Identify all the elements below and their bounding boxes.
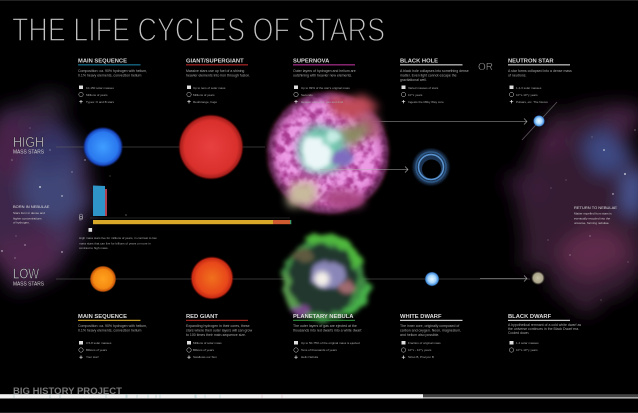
nebula: birth, left bbox=[0, 90, 90, 283]
panel: white dwarf: and helium also possible. bbox=[400, 333, 439, 337]
panel: top main sequence: MAIN SEQUENCE bbox=[78, 58, 127, 64]
timeline band bbox=[0, 394, 638, 398]
panel: red giant: Billions of years bbox=[193, 348, 215, 352]
panel: giant/supergiant bbox=[186, 58, 250, 104]
panel: planetary nebula: PLANETARY NEBULA bbox=[293, 314, 354, 320]
panel: black dwarf: Cooled down. bbox=[508, 331, 529, 335]
panel: bottom main sequence: Composition: ca. 90% hydrogen with helium, bbox=[78, 324, 147, 328]
star: low-mass main sequence bbox=[90, 266, 116, 292]
panel: black dwarf: 10^x-10^y years bbox=[516, 348, 538, 352]
heading: high mass stars: HIGH bbox=[13, 135, 44, 151]
panel: black hole: gravitational well. bbox=[400, 78, 427, 82]
star: high-mass main sequence bbox=[82, 126, 124, 168]
panel: planetary nebula: thousands into red dwarfs into a white dwarf. bbox=[293, 328, 362, 332]
footer: big history project bbox=[0, 386, 638, 398]
panel: planetary nebula bbox=[293, 314, 362, 359]
panel: red giant: RED GIANT bbox=[186, 314, 218, 320]
text: born in nebulae bbox=[13, 204, 50, 224]
panel: neutron star: NEUTRON STAR bbox=[508, 58, 554, 64]
panel: black dwarf bbox=[508, 314, 581, 352]
panel: supernova: Up to 99% of the star's original mass bbox=[301, 86, 350, 90]
panel: black dwarf: BLACK DWARF bbox=[508, 314, 552, 320]
panel: bottom main sequence: 0.5-8 solar masses bbox=[86, 341, 112, 345]
panel: top main sequence: Types: O and B stars bbox=[86, 100, 115, 104]
footer: big history project: BIG HISTORY PROJECT bbox=[13, 386, 123, 396]
text: born in nebulae: higher concentrations bbox=[13, 216, 42, 220]
panel: white dwarf: Sirius B, Procyon B bbox=[408, 355, 434, 359]
planetary nebula bbox=[285, 239, 369, 318]
star: red supergiant bbox=[178, 114, 244, 180]
panel: neutron star: 10^x-10^y years bbox=[516, 93, 538, 97]
panel: black hole: Varied masses of stars bbox=[408, 86, 439, 90]
panel: supernova: SUPERNOVA bbox=[293, 58, 330, 64]
text: born in nebulae: Stars form in dense and bbox=[13, 211, 45, 215]
panel: neutron star: of neutrons. bbox=[508, 74, 527, 78]
panel: black hole: BLACK HOLE bbox=[400, 58, 438, 64]
panel: supernova: Seconds bbox=[301, 93, 313, 97]
panel: supernova: outshining with heavier new elements. bbox=[293, 74, 352, 78]
panel: bottom main sequence: Billions of years bbox=[86, 348, 108, 352]
panel: top main sequence: Millions of years bbox=[86, 93, 108, 97]
text: return to nebulae: universe, forming nebulae. bbox=[574, 221, 610, 225]
panel: neutron star: A star forms collapsed into a dense mass bbox=[508, 69, 572, 73]
nebula star field bbox=[1, 128, 636, 300]
label: or: OR bbox=[478, 61, 493, 73]
panel: supernova: Heavier elements, gas and dust bbox=[301, 100, 343, 104]
panel: black dwarf: the universe continues in the Black Dwarf era. bbox=[508, 327, 579, 331]
panel: bottom main sequence: MAIN SEQUENCE bbox=[78, 314, 127, 320]
panel: black hole: A black hole collapses into something dense bbox=[400, 69, 469, 73]
panel: bottom main sequence: Your star! bbox=[86, 355, 99, 359]
arrow: supernova to black hole bbox=[320, 166, 408, 172]
panel: supernova: Outer layers of hydrogen and helium are bbox=[293, 69, 356, 73]
panel: black hole bbox=[400, 58, 469, 104]
panel: top main sequence bbox=[78, 58, 147, 104]
heading: high mass stars: MASS STARS bbox=[13, 150, 45, 156]
panel: neutron star: 1.4-3 solar masses bbox=[516, 86, 542, 90]
panel: white dwarf: Fraction of original mass bbox=[408, 341, 441, 345]
title: THE LIFE CYCLES OF STARS bbox=[12, 11, 385, 48]
connector lines bbox=[56, 147, 530, 279]
supernova bbox=[264, 89, 392, 217]
supernova mottling bbox=[274, 99, 382, 207]
heading: low mass stars: LOW bbox=[13, 266, 39, 282]
panel: red giant: Expanding hydrogen in their cores, these bbox=[186, 324, 250, 328]
panel: red giant: stars where their outer layers will can grow bbox=[186, 328, 253, 332]
panel: planetary nebula: Tens of thousands of years bbox=[301, 348, 337, 352]
panel: giant/supergiant: Up to tens of solar mass bbox=[193, 86, 226, 90]
white dwarf bbox=[424, 272, 440, 286]
neutron star bbox=[522, 102, 557, 140]
star: red giant bbox=[190, 256, 234, 300]
panel: giant/supergiant: Massive stars use up fuel of a shining bbox=[186, 69, 244, 73]
text: born in nebulae: BORN IN NEBULAE bbox=[13, 204, 50, 209]
panel: planetary nebula: The outer layers of gas are ejected at the bbox=[293, 324, 357, 328]
nebula: return, right bbox=[510, 105, 638, 305]
text: return to nebulae: RETURN TO NEBULAE bbox=[574, 205, 617, 210]
panel: white dwarf: WHITE DWARF bbox=[400, 314, 442, 320]
chart bar: low mass lifetime bbox=[93, 220, 291, 224]
text: chart caption bbox=[79, 236, 158, 250]
panel: black hole: Ingests the Milky Way core bbox=[408, 100, 444, 104]
panel: black hole: matter. Even light cannot escape the bbox=[400, 74, 457, 78]
panel: top main sequence: 0.1% heavy elements, convection helium bbox=[78, 74, 142, 78]
panel: red giant: to 100 times their main-sequence size. bbox=[186, 333, 246, 337]
panel: planetary nebula: Helix Nebula bbox=[301, 355, 318, 359]
black hole bbox=[413, 149, 449, 185]
panel: top main sequence: 10-150 solar masses bbox=[86, 86, 114, 90]
panel: neutron star: Pulsars, etc. The Nexus bbox=[516, 100, 548, 104]
text: chart caption: contrast to high mass. bbox=[79, 246, 109, 250]
panel: giant/supergiant: Red/orange, huge bbox=[193, 100, 217, 104]
text: born in nebulae: of hydrogen. bbox=[13, 220, 30, 224]
panel: white dwarf: carbon and oxygen. Neon, magnesium, bbox=[400, 328, 461, 332]
chart: stellar lifetimes bbox=[79, 186, 291, 250]
arrow: supernova to neutron star bbox=[320, 118, 527, 124]
panel: white dwarf: 10^x - 10^y years bbox=[408, 348, 432, 352]
panel: red giant bbox=[186, 314, 253, 359]
panel: red giant: Swallows our Sun bbox=[193, 355, 217, 359]
panel: black dwarf: A hypothetical remnant of a cold white dwarf as bbox=[508, 323, 581, 327]
panel: giant/supergiant: heavier elements into iron through fusion. bbox=[186, 74, 250, 78]
panel: white dwarf bbox=[400, 314, 462, 359]
panel: black dwarf: 1.4 solar masses bbox=[516, 341, 539, 345]
panel: bottom main sequence: 0.1% heavy elements, convection helium bbox=[78, 328, 142, 332]
text: chart caption: High mass stars live for millions of years, in contrast to low bbox=[79, 236, 158, 240]
panel: giant/supergiant: Millions of years bbox=[193, 93, 215, 97]
text: return to nebulae bbox=[574, 205, 617, 225]
panel: red giant: Millions of solar mass bbox=[193, 341, 222, 345]
text: return to nebulae: Matter expelled from stars is bbox=[574, 212, 612, 216]
black dwarf bbox=[531, 271, 545, 285]
arrow: low track to black dwarf bbox=[480, 276, 527, 282]
text: return to nebulae: eventually recycled into the bbox=[574, 216, 611, 220]
panel: white dwarf: The inner core, originally composed of bbox=[400, 324, 459, 328]
heading: low mass stars: MASS STARS bbox=[13, 282, 45, 288]
icon: clock bbox=[80, 214, 82, 220]
panel: supernova bbox=[293, 58, 356, 104]
text: chart caption: mass stars that can live for billions of years or more in bbox=[79, 242, 151, 246]
panel: top main sequence: Composition: ca. 90% hydrogen with helium, bbox=[78, 69, 147, 73]
panel: black hole: 10^x years bbox=[408, 93, 423, 97]
icon: mass bbox=[88, 228, 92, 232]
panel: neutron star bbox=[508, 58, 572, 104]
panel: planetary nebula: Up to 50-75% of the original mass is ejected bbox=[301, 341, 360, 345]
panel: bottom main sequence bbox=[78, 314, 147, 359]
chart bar: high mass lifetime bbox=[93, 186, 105, 216]
panel: giant/supergiant: GIANT/SUPERGIANT bbox=[186, 58, 244, 64]
